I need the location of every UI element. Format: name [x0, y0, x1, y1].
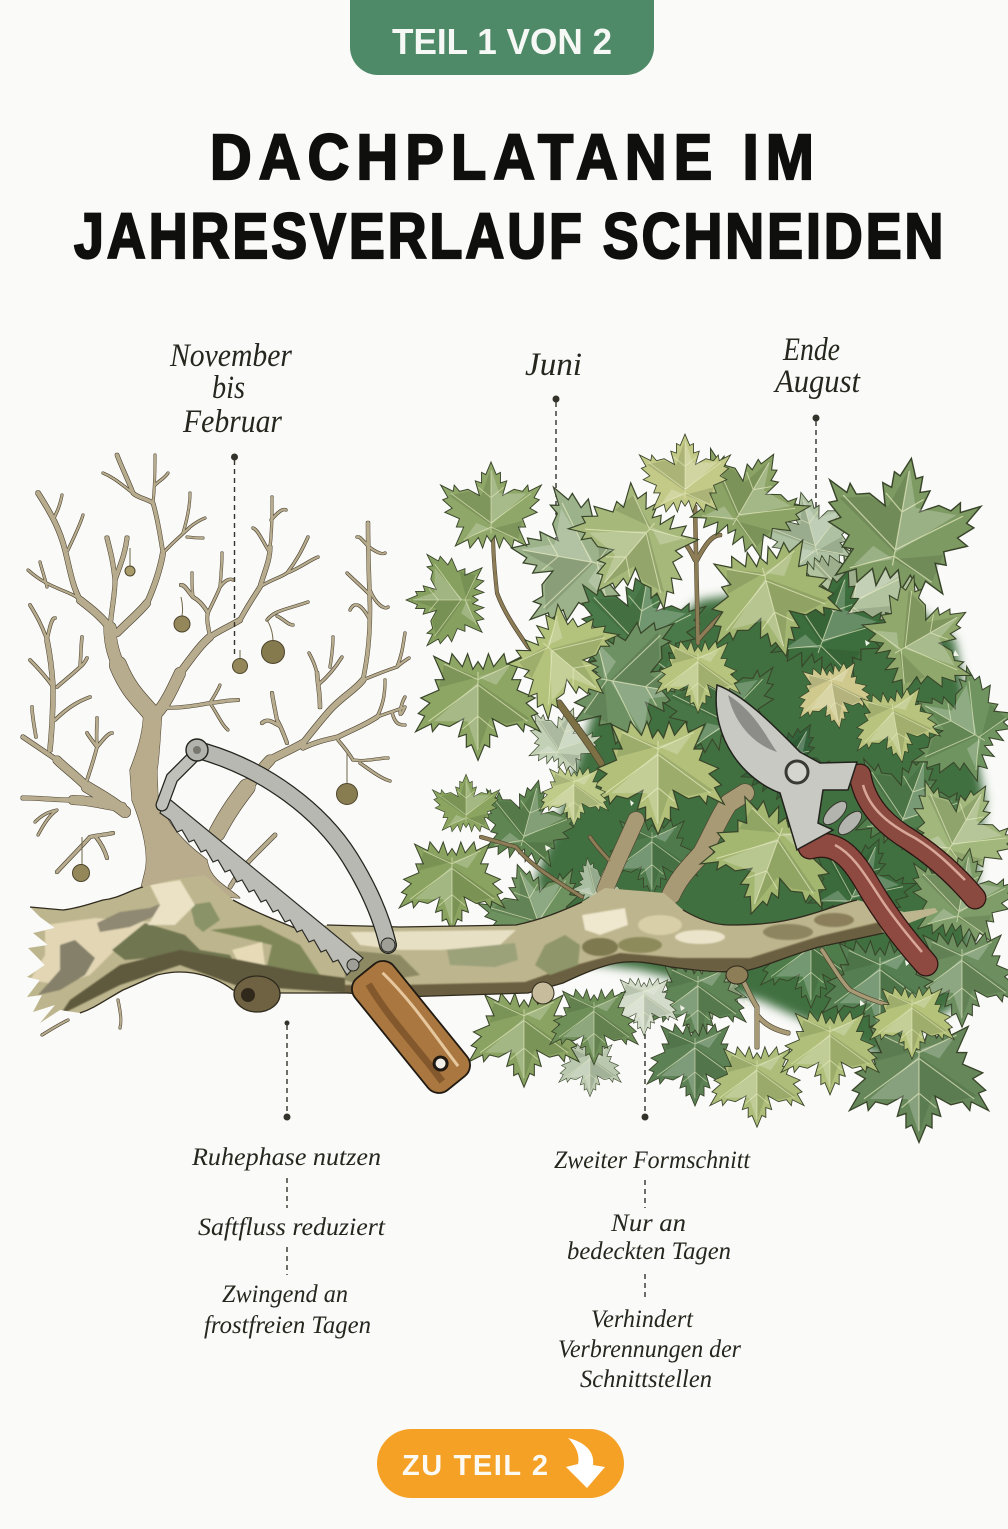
foreground leaves: [399, 426, 994, 1127]
notes: Ruhephase: frostfreien Tagen: [204, 1312, 371, 1339]
title: JAHRESVERLAUF SCHNEIDEN: [74, 200, 943, 272]
pruning shears: [716, 685, 975, 964]
bark camouflage patches: [30, 880, 884, 1015]
buds below bark: [42, 1000, 121, 1035]
saw frame: [205, 752, 388, 945]
white specks: [545, 640, 959, 1011]
small twig through the fork: [230, 835, 275, 887]
notes: Ruhephase: [191, 1144, 386, 1339]
dashed pointer lines: [231, 396, 820, 1120]
shears spring: [819, 797, 851, 829]
notes: Zweiter Formschnitt: bedeckten Tagen: [567, 1238, 731, 1265]
notes: Zweiter Formschnitt: Nur an: [610, 1210, 686, 1237]
notes: Zweiter Formschnitt: Schnittstellen: [580, 1366, 712, 1393]
bow saw: [160, 739, 476, 1099]
notes: Ruhephase: Zwingend an: [222, 1281, 348, 1308]
title: DACHPLATANE IM: [210, 121, 814, 193]
bare winter branches: [23, 455, 409, 1035]
icon: curved down arrow: [566, 1438, 605, 1488]
foliage background mass: [470, 481, 1008, 1142]
badge: Teil 1 von 2: TEIL 1 VON 2: [392, 21, 612, 62]
branch knots: [234, 976, 280, 1012]
label: Ende August: Ende: [782, 332, 840, 368]
season labels above the branch: [169, 332, 861, 440]
label: Juni: Juni: [525, 347, 582, 383]
saw handle: [346, 955, 476, 1099]
main bark branch: [27, 876, 938, 1023]
title: [74, 121, 943, 272]
bark outline: [30, 887, 884, 1013]
button: Zu Teil 2: ZU TEIL 2: [402, 1450, 548, 1482]
trunk: [130, 706, 240, 898]
button: Zu Teil 2: [377, 1429, 624, 1498]
label: November bis Februar: Februar: [182, 404, 282, 440]
notes: Zweiter Formschnitt: Verbrennungen der: [558, 1336, 741, 1363]
badge: Teil 1 von 2: [350, 0, 654, 75]
hanging seed balls: [72, 548, 358, 882]
saw blade: [160, 797, 363, 975]
notes: Ruhephase: Saftfluss reduziert: [198, 1214, 386, 1241]
shears pivot: [786, 761, 808, 783]
notes: Ruhephase: Ruhephase nutzen: [191, 1144, 381, 1171]
label: Ende August: [773, 332, 861, 400]
notes: Zweiter Formschnitt: Zweiter Formschnitt: [554, 1147, 751, 1174]
side branches and leaf stems: [481, 507, 896, 1047]
label: November bis Februar: [169, 338, 292, 440]
notes: Zweiter Formschnitt: Verhindert: [591, 1306, 694, 1333]
shears metal body: [716, 685, 857, 850]
label: Ende August: August: [773, 364, 861, 400]
label: November bis Februar: bis: [212, 370, 245, 406]
shears handles: [860, 775, 975, 898]
label: November bis Februar: November: [169, 338, 292, 374]
notes: Zweiter Formschnitt: [554, 1147, 751, 1393]
